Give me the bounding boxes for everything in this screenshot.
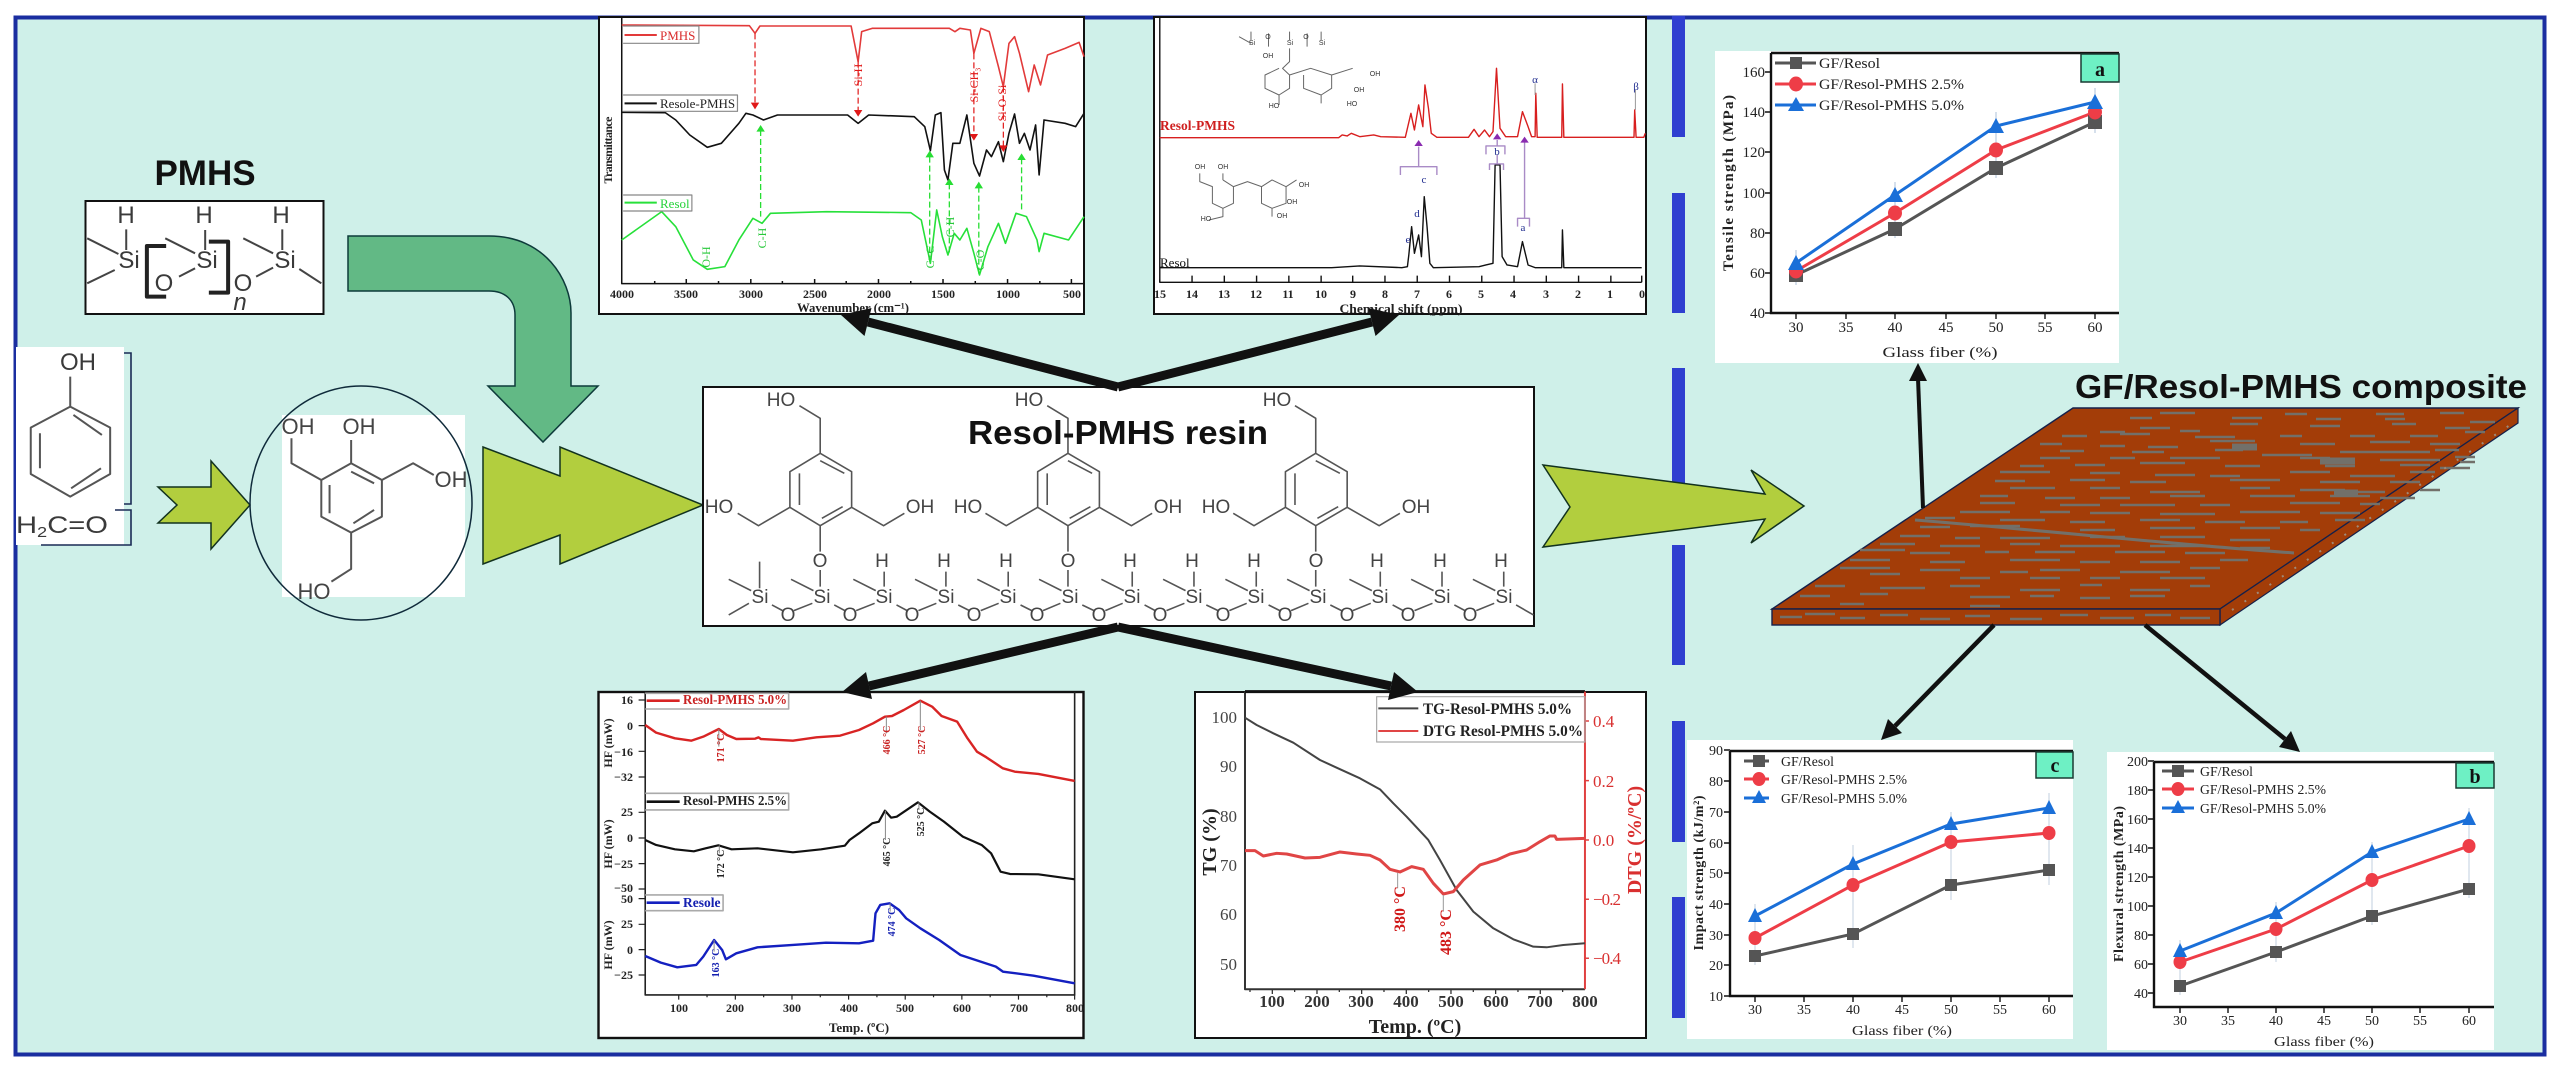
panel: FTIR spectra: 1000 bbox=[996, 287, 1020, 301]
panel: DSC curves: 200 bbox=[726, 1001, 744, 1015]
panel: DSC curves: 16 bbox=[621, 693, 633, 707]
panel: TG / DTG curves: 60 bbox=[1220, 905, 1237, 924]
panel: NMR spectra: 9 bbox=[1350, 287, 1356, 301]
chart c: impact strength: GF/Resol bbox=[1781, 754, 1834, 769]
panel: TG / DTG curves: 50 bbox=[1220, 955, 1237, 974]
panel: DSC curves: 600 bbox=[953, 1001, 971, 1015]
panel: PMHS structure: Si bbox=[118, 247, 140, 274]
chart a: tensile strength: 35 bbox=[1838, 320, 1854, 336]
panel: NMR spectra bbox=[1154, 17, 1646, 316]
chart c: impact strength: GF/Resol-PMHS 2.5% bbox=[1781, 772, 1907, 787]
panel: DSC curves: HF (mW) bbox=[601, 920, 615, 970]
resin atoms: Si bbox=[1372, 587, 1388, 608]
chart c: impact strength: 55 bbox=[1993, 1003, 2007, 1018]
chart b: flexural strength: 50 bbox=[2365, 1014, 2379, 1029]
resin atoms: H bbox=[1123, 551, 1137, 572]
chart a: tensile strength: 80 bbox=[1750, 226, 1765, 242]
resin atoms: H bbox=[1185, 551, 1199, 572]
panel: TG / DTG curves: 483 °C bbox=[1438, 909, 1455, 955]
resin atoms: Si bbox=[1062, 587, 1078, 608]
chart c: impact strength: 90 bbox=[1709, 744, 1723, 759]
chart a: tensile strength: 45 bbox=[1938, 320, 1954, 336]
error bars bbox=[1755, 793, 2049, 965]
panel: PMHS structure bbox=[86, 201, 324, 316]
NMR molecule: Resol: HO bbox=[1201, 216, 1212, 223]
chart a: tensile strength: 55 bbox=[2038, 320, 2052, 336]
panel: DSC curves: HF (mW) bbox=[601, 718, 615, 768]
panel: NMR spectra: a bbox=[1521, 222, 1526, 234]
panel: DSC curves: 466 °C bbox=[882, 726, 893, 754]
NMR molecule: Resol-PMHS: HO bbox=[1269, 103, 1280, 110]
resin atoms: HO bbox=[1263, 390, 1291, 411]
panel: NMR spectra: 12 bbox=[1250, 287, 1262, 301]
chart c: impact strength: 80 bbox=[1709, 775, 1723, 790]
chart c: impact strength: 70 bbox=[1709, 806, 1723, 821]
chart b: flexural strength: 120 bbox=[2127, 871, 2148, 886]
resin atoms: H bbox=[999, 551, 1013, 572]
panel: NMR spectra: 4 bbox=[1510, 287, 1516, 301]
chart b: flexural strength: GF/Resol-PMHS 5.0% bbox=[2200, 801, 2326, 816]
panel: NMR spectra: 14 bbox=[1186, 287, 1198, 301]
arrow: big yellow-green arrow bbox=[483, 447, 703, 564]
panel: DSC curves bbox=[598, 692, 1084, 1038]
panel: DSC curves: Resol-PMHS 2.5% bbox=[683, 793, 787, 808]
resin atoms: Si bbox=[876, 587, 892, 608]
chart c: impact strength: 30 bbox=[1709, 929, 1723, 944]
panel: TG / DTG curves: 70 bbox=[1220, 856, 1237, 875]
panel: DSC curves: 465 °C bbox=[882, 838, 893, 866]
resin atoms: O bbox=[905, 605, 919, 626]
resin atoms: O bbox=[1061, 551, 1075, 572]
panel: PMHS structure: H bbox=[195, 202, 213, 229]
panel: FTIR spectra: C-H bbox=[755, 227, 769, 248]
panel: TG / DTG curves: 80 bbox=[1220, 807, 1237, 826]
arrow: curved green PMHS arrow bbox=[348, 236, 598, 442]
panel: TG / DTG curves: 400 bbox=[1393, 992, 1419, 1011]
chart c: impact strength: 60 bbox=[2042, 1003, 2056, 1018]
chart a: tensile strength: Glass fiber (%) bbox=[1882, 345, 1998, 361]
arrow: composite to tensile chart bbox=[1909, 363, 1927, 508]
panel: DSC curves: 527 °C bbox=[917, 726, 928, 754]
panel: DSC curves: 0 bbox=[627, 943, 633, 957]
panel: phenol and formaldehyde: H bbox=[16, 512, 33, 539]
chart c: impact strength: 35 bbox=[1797, 1003, 1811, 1018]
panel: NMR spectra: Resol bbox=[1160, 255, 1190, 270]
panel: FTIR spectra: Si-H bbox=[851, 63, 865, 86]
panel: DSC curves: −32 bbox=[614, 770, 633, 784]
panel: TG / DTG curves: 500 bbox=[1438, 992, 1464, 1011]
chart a: tensile strength: 100 bbox=[1742, 186, 1765, 202]
panel: FTIR spectra bbox=[599, 17, 1084, 315]
panel: NMR spectra: 3 bbox=[1543, 287, 1549, 301]
resin atoms: Si bbox=[1496, 587, 1512, 608]
panel: DSC curves: 25 bbox=[621, 805, 633, 819]
panel: DSC curves: 500 bbox=[896, 1001, 914, 1015]
resin atoms: O bbox=[1309, 551, 1323, 572]
panel: FTIR spectra: C-H bbox=[943, 216, 957, 237]
panel: NMR spectra: 1 bbox=[1607, 287, 1613, 301]
panel: TG / DTG curves: −0.4 bbox=[1593, 949, 1622, 968]
panel: NMR spectra: α bbox=[1532, 74, 1538, 86]
blue dashed divider bbox=[1672, 16, 1685, 1018]
panel: TG / DTG curves: 380 °C bbox=[1392, 886, 1409, 932]
resin atoms: Si bbox=[1310, 587, 1326, 608]
panel: PMHS structure: O bbox=[155, 270, 173, 297]
panel: NMR spectra: e bbox=[1406, 234, 1411, 246]
panel: TG / DTG curves: Temp. (ºC) bbox=[1369, 1016, 1461, 1038]
resin atoms: O bbox=[1401, 605, 1415, 626]
resin atoms: Si bbox=[1186, 587, 1202, 608]
panel: FTIR spectra: Resol bbox=[660, 196, 690, 211]
resin atoms: H bbox=[1370, 551, 1384, 572]
NMR molecule: Resol: OH bbox=[1277, 213, 1287, 220]
panel: TG / DTG curves: 0.0 bbox=[1593, 831, 1614, 850]
resin atoms: Si bbox=[752, 587, 768, 608]
panel: trihydroxymethyl phenol circle: OH bbox=[434, 467, 468, 492]
panel: FTIR spectra: O-H bbox=[699, 246, 713, 268]
panel: DSC curves: 400 bbox=[840, 1001, 858, 1015]
chart a: tensile strength: GF/Resol-PMHS 5.0% bbox=[1819, 98, 1964, 114]
resin atoms: Si bbox=[1000, 587, 1016, 608]
resin atoms: H bbox=[875, 551, 889, 572]
arrow: resin to composite bbox=[1543, 465, 1804, 547]
panel: TG / DTG curves: 600 bbox=[1483, 992, 1509, 1011]
resin atoms: O bbox=[967, 605, 981, 626]
chart a: tensile strength: 60 bbox=[1750, 266, 1765, 282]
panel: FTIR spectra: Resole-PMHS bbox=[660, 96, 735, 111]
panel: TG / DTG curves bbox=[1195, 692, 1646, 1038]
chart c: impact strength: Impact strength (kJ/m²) bbox=[1692, 795, 1707, 950]
panel: TG / DTG curves: 100 bbox=[1259, 992, 1285, 1011]
NMR molecule: Resol-PMHS: Si bbox=[1249, 40, 1256, 47]
chart b: flexural strength: 200 bbox=[2127, 755, 2148, 770]
chart a: tensile strength bbox=[1715, 51, 2119, 363]
panel: DSC curves: −50 bbox=[614, 881, 633, 895]
NMR molecule: Resol-PMHS: OH bbox=[1370, 71, 1380, 78]
chart a: tensile strength: Tensile strength (MPa) bbox=[1721, 95, 1737, 271]
panel: NMR spectra: β bbox=[1633, 81, 1639, 93]
NMR molecule: Resol-PMHS: O bbox=[1303, 34, 1309, 41]
panel: trihydroxymethyl phenol circle bbox=[250, 386, 472, 620]
panel: phenol and formaldehyde bbox=[16, 347, 131, 545]
title: PMHS: PMHS bbox=[154, 154, 256, 193]
resin atoms: O bbox=[1463, 605, 1477, 626]
resin atoms: Si bbox=[1248, 587, 1264, 608]
arrow: small yellow-green arrow bbox=[158, 461, 250, 549]
resin atoms: OH bbox=[1154, 497, 1182, 518]
panel: DSC curves: 0 bbox=[627, 831, 633, 845]
panel: DSC curves: 474 °C bbox=[887, 908, 898, 936]
title: Resol-PMHS resin: Resol-PMHS resin bbox=[968, 414, 1268, 451]
chart c: impact strength: 50 bbox=[1944, 1003, 1958, 1018]
resin atoms: O bbox=[1340, 605, 1354, 626]
NMR molecule: Resol: OH bbox=[1218, 164, 1228, 171]
panel: DSC curves: −25 bbox=[614, 857, 633, 871]
resin atoms: HO bbox=[705, 497, 733, 518]
panel: phenol and formaldehyde: OH bbox=[60, 349, 96, 376]
panel: NMR spectra: b bbox=[1494, 146, 1500, 158]
resin atoms: HO bbox=[954, 497, 982, 518]
resin atoms: HO bbox=[767, 390, 795, 411]
panel: trihydroxymethyl phenol circle: OH bbox=[282, 414, 314, 439]
panel: composite plate bbox=[1772, 408, 2518, 625]
chart a: tensile strength: 40 bbox=[1750, 306, 1765, 322]
panel: DSC curves: 700 bbox=[1010, 1001, 1028, 1015]
chart c: impact strength: 45 bbox=[1895, 1003, 1909, 1018]
panel: TG / DTG curves: DTG (%/ºC) bbox=[1624, 786, 1646, 894]
NMR molecule: Resol-PMHS: OH bbox=[1354, 87, 1364, 94]
resin atoms bbox=[705, 390, 1512, 626]
chart a: tensile strength: 50 bbox=[1988, 320, 2004, 336]
chart a: tensile strength: 60 bbox=[2088, 320, 2102, 336]
NMR molecule: Resol: OH bbox=[1195, 164, 1205, 171]
panel: trihydroxymethyl phenol circle: HO bbox=[298, 579, 330, 604]
panel: TG / DTG curves: 0.2 bbox=[1593, 772, 1614, 791]
resin atoms: O bbox=[1092, 605, 1106, 626]
chart b: flexural strength: 35 bbox=[2221, 1014, 2235, 1029]
chart b: flexural strength: 45 bbox=[2317, 1014, 2331, 1029]
NMR traces bbox=[1160, 17, 1645, 282]
resin atoms: H bbox=[1433, 551, 1447, 572]
resin atoms: Si bbox=[1434, 587, 1450, 608]
glass fibers bbox=[1780, 413, 2495, 619]
panel: NMR spectra: 13 bbox=[1218, 287, 1230, 301]
resin atoms: OH bbox=[1402, 497, 1430, 518]
NMR molecule: Resol-PMHS: Si bbox=[1319, 40, 1326, 47]
chart a: tensile strength: 160 bbox=[1742, 65, 1765, 81]
panel: FTIR spectra: 1500 bbox=[931, 287, 955, 301]
resin atoms: O bbox=[1216, 605, 1230, 626]
panel: phenol and formaldehyde: C=O bbox=[47, 512, 108, 539]
panel: NMR spectra: c bbox=[1422, 174, 1427, 186]
panel: PMHS structure: Si bbox=[196, 247, 218, 274]
panel: PMHS structure: O bbox=[234, 270, 252, 297]
panel: TG / DTG curves: 800 bbox=[1572, 992, 1598, 1011]
error bars bbox=[1796, 88, 2095, 285]
chart a: tensile strength: GF/Resol-PMHS 2.5% bbox=[1819, 77, 1964, 93]
resin atoms: O bbox=[813, 551, 827, 572]
panel: NMR spectra: 6 bbox=[1446, 287, 1452, 301]
panel: DSC curves: −16 bbox=[614, 745, 633, 759]
chart c: impact strength: 50 bbox=[1709, 867, 1723, 882]
NMR molecule: Resol: OH bbox=[1287, 199, 1297, 206]
NMR molecule: Resol: OH bbox=[1299, 182, 1309, 189]
panel: TG / DTG curves: DTG Resol-PMHS 5.0% bbox=[1423, 723, 1583, 740]
panel: DSC curves: 0 bbox=[627, 719, 633, 733]
resin atoms: Si bbox=[1124, 587, 1140, 608]
panel: FTIR spectra: C-O bbox=[973, 249, 987, 270]
NMR molecule: Resol-PMHS: O bbox=[1265, 34, 1271, 41]
panel: TG / DTG curves: TG-Resol-PMHS 5.0% bbox=[1423, 701, 1572, 718]
panel: FTIR spectra: Si-CH₃ bbox=[967, 68, 981, 102]
panel: DSC curves: 171 °C bbox=[716, 734, 727, 762]
NMR molecule: Resol-PMHS: OH bbox=[1263, 53, 1273, 60]
chart a: tensile strength: 120 bbox=[1742, 145, 1765, 161]
title: composite: GF/Resol-PMHS composite bbox=[2075, 368, 2527, 405]
chart a: tensile strength: GF/Resol bbox=[1819, 56, 1880, 72]
panel: DSC curves: 100 bbox=[670, 1001, 688, 1015]
chart b: flexural strength: 30 bbox=[2173, 1014, 2187, 1029]
NMR molecule: Resol-PMHS: HO bbox=[1347, 101, 1358, 108]
FTIR traces bbox=[622, 17, 1084, 284]
panel: NMR spectra: d bbox=[1414, 208, 1420, 220]
panel: PMHS structure: Si bbox=[274, 247, 296, 274]
panel: DSC curves: Resole bbox=[683, 895, 720, 910]
panel: NMR spectra: 11 bbox=[1282, 287, 1294, 301]
panel: DSC curves: 800 bbox=[1066, 1001, 1084, 1015]
chart b: flexural strength: 55 bbox=[2413, 1014, 2427, 1029]
panel: TG / DTG curves: 200 bbox=[1304, 992, 1330, 1011]
panel: FTIR spectra: 3500 bbox=[674, 287, 698, 301]
error bars bbox=[2180, 808, 2469, 995]
NMR molecule: Resol bbox=[1195, 164, 1309, 223]
panel: NMR spectra: Chemical shift (ppm) bbox=[1340, 301, 1462, 316]
panel: TG / DTG curves: 300 bbox=[1348, 992, 1374, 1011]
panel: trihydroxymethyl phenol circle: OH bbox=[342, 414, 376, 439]
chart a: tensile strength: 30 bbox=[1788, 320, 1804, 336]
chart b: flexural strength: 180 bbox=[2127, 784, 2148, 799]
chart b: flexural strength: 140 bbox=[2127, 842, 2148, 857]
resin structure bonds bbox=[729, 406, 1533, 615]
resin atoms: H bbox=[1247, 551, 1261, 572]
resin atoms: O bbox=[781, 605, 795, 626]
resin atoms: O bbox=[1153, 605, 1167, 626]
chart c: impact strength: 60 bbox=[1709, 837, 1723, 852]
chart b: flexural strength: Flexural strength (MPa) bbox=[2112, 806, 2127, 962]
panel: FTIR spectra: Si-O-Si bbox=[995, 84, 1009, 121]
panel: DSC curves: 163 °C bbox=[711, 949, 722, 977]
panel: FTIR spectra: PMHS bbox=[660, 28, 695, 43]
chart b: flexural strength: 60 bbox=[2462, 1014, 2476, 1029]
chart c: impact strength: 10 bbox=[1709, 990, 1723, 1005]
resin atoms: HO bbox=[1202, 497, 1230, 518]
chart b: flexural strength: 80 bbox=[2134, 929, 2148, 944]
panel: FTIR spectra: Transmittance bbox=[601, 116, 615, 184]
chart b: flexural strength: b bbox=[2469, 766, 2481, 788]
DSC traces bbox=[639, 692, 1075, 1000]
panel: NMR spectra: 2 bbox=[1575, 287, 1581, 301]
panel: DSC curves: 172 °C bbox=[716, 850, 727, 878]
panel: DSC curves: 50 bbox=[621, 892, 633, 906]
panel: DSC curves: 525 °C bbox=[916, 808, 927, 836]
panel: FTIR spectra: 2000 bbox=[867, 287, 891, 301]
panel: FTIR spectra: C=C bbox=[923, 246, 937, 268]
resin atoms: Si bbox=[938, 587, 954, 608]
resin atoms: O bbox=[1030, 605, 1044, 626]
chart a: tensile strength: 140 bbox=[1742, 105, 1765, 121]
chart c: impact strength: 40 bbox=[1846, 1003, 1860, 1018]
chart a: tensile strength: a bbox=[2095, 59, 2105, 81]
panel: PMHS structure: n bbox=[233, 289, 247, 316]
panel: TG / DTG curves: 100 bbox=[1212, 708, 1237, 727]
panel: FTIR spectra: 2500 bbox=[803, 287, 827, 301]
panel: PMHS structure: H bbox=[117, 202, 135, 229]
panel: FTIR spectra: 500 bbox=[1063, 287, 1081, 301]
resin atoms: H bbox=[937, 551, 951, 572]
resin atoms: O bbox=[1278, 605, 1292, 626]
resin atoms: O bbox=[843, 605, 857, 626]
chart b: flexural strength: 100 bbox=[2127, 900, 2148, 915]
panel: NMR spectra: 0 bbox=[1639, 287, 1645, 301]
panel: DSC curves: HF (mW) bbox=[601, 819, 615, 869]
chart a: tensile strength: 40 bbox=[1888, 320, 1902, 336]
chart c: impact strength bbox=[1687, 740, 2073, 1039]
resin atoms: OH bbox=[906, 497, 934, 518]
arrow: composite to flexural chart bbox=[2145, 625, 2300, 752]
plate faces bbox=[1772, 408, 2518, 609]
panel: DSC curves: −25 bbox=[614, 968, 633, 982]
arrow: composite to impact chart bbox=[1881, 625, 1994, 740]
panel: TG / DTG curves: −0.2 bbox=[1593, 890, 1621, 909]
chart c: impact strength: GF/Resol-PMHS 5.0% bbox=[1781, 791, 1907, 806]
chart b: flexural strength: 60 bbox=[2134, 958, 2148, 973]
chart c: impact strength: 30 bbox=[1748, 1003, 1762, 1018]
panel: FTIR spectra: 4000 bbox=[610, 287, 634, 301]
chart b: flexural strength bbox=[2107, 752, 2494, 1050]
panel: DSC curves: 25 bbox=[621, 917, 633, 931]
panel: phenol and formaldehyde: 2 bbox=[37, 524, 47, 541]
NMR molecule: Resol-PMHS: Si bbox=[1287, 40, 1294, 47]
panel: FTIR spectra: Wavenumber (cm⁻¹) bbox=[797, 300, 909, 315]
chart b: flexural strength: GF/Resol bbox=[2200, 764, 2253, 779]
chart c: impact strength: c bbox=[2051, 755, 2060, 777]
chart b: flexural strength: 160 bbox=[2127, 813, 2148, 828]
panel: FTIR spectra: 3000 bbox=[739, 287, 763, 301]
resin atoms: Si bbox=[814, 587, 830, 608]
chart c: impact strength: 20 bbox=[1709, 959, 1723, 974]
panel: NMR spectra: 10 bbox=[1315, 287, 1327, 301]
panel: Resol-PMHS resin bbox=[703, 387, 1534, 626]
chart b: flexural strength: GF/Resol-PMHS 2.5% bbox=[2200, 782, 2326, 797]
panel: NMR spectra: 15 bbox=[1154, 287, 1166, 301]
panel: NMR spectra: Resol-PMHS bbox=[1160, 119, 1235, 134]
chart b: flexural strength: 40 bbox=[2134, 987, 2148, 1002]
arrows: resin to characterization panels bbox=[841, 308, 1418, 700]
panel: DSC curves: Resol-PMHS 5.0% bbox=[683, 692, 787, 707]
chart b: flexural strength: Glass fiber (%) bbox=[2274, 1035, 2374, 1050]
resin atoms: H bbox=[1494, 551, 1508, 572]
TG traces bbox=[1245, 692, 1589, 994]
panel: NMR spectra: 7 bbox=[1414, 287, 1420, 301]
panel: TG / DTG curves: 700 bbox=[1527, 992, 1553, 1011]
panel: NMR spectra: 8 bbox=[1382, 287, 1388, 301]
NMR molecule: Resol-PMHS bbox=[1239, 32, 1380, 110]
panel: TG / DTG curves: 0.4 bbox=[1593, 712, 1615, 731]
chart c: impact strength: 40 bbox=[1709, 898, 1723, 913]
panel: NMR spectra: 5 bbox=[1478, 287, 1484, 301]
chart b: flexural strength: 40 bbox=[2269, 1014, 2283, 1029]
panel: DSC curves: 300 bbox=[783, 1001, 801, 1015]
panel: DSC curves: Temp. (ºC) bbox=[829, 1020, 889, 1035]
panel: TG / DTG curves: TG (%) bbox=[1199, 808, 1221, 876]
chart c: impact strength: Glass fiber (%) bbox=[1852, 1024, 1952, 1039]
resin atoms: HO bbox=[1015, 390, 1043, 411]
panel: TG / DTG curves: 90 bbox=[1220, 757, 1237, 776]
panel: PMHS structure: H bbox=[272, 202, 290, 229]
